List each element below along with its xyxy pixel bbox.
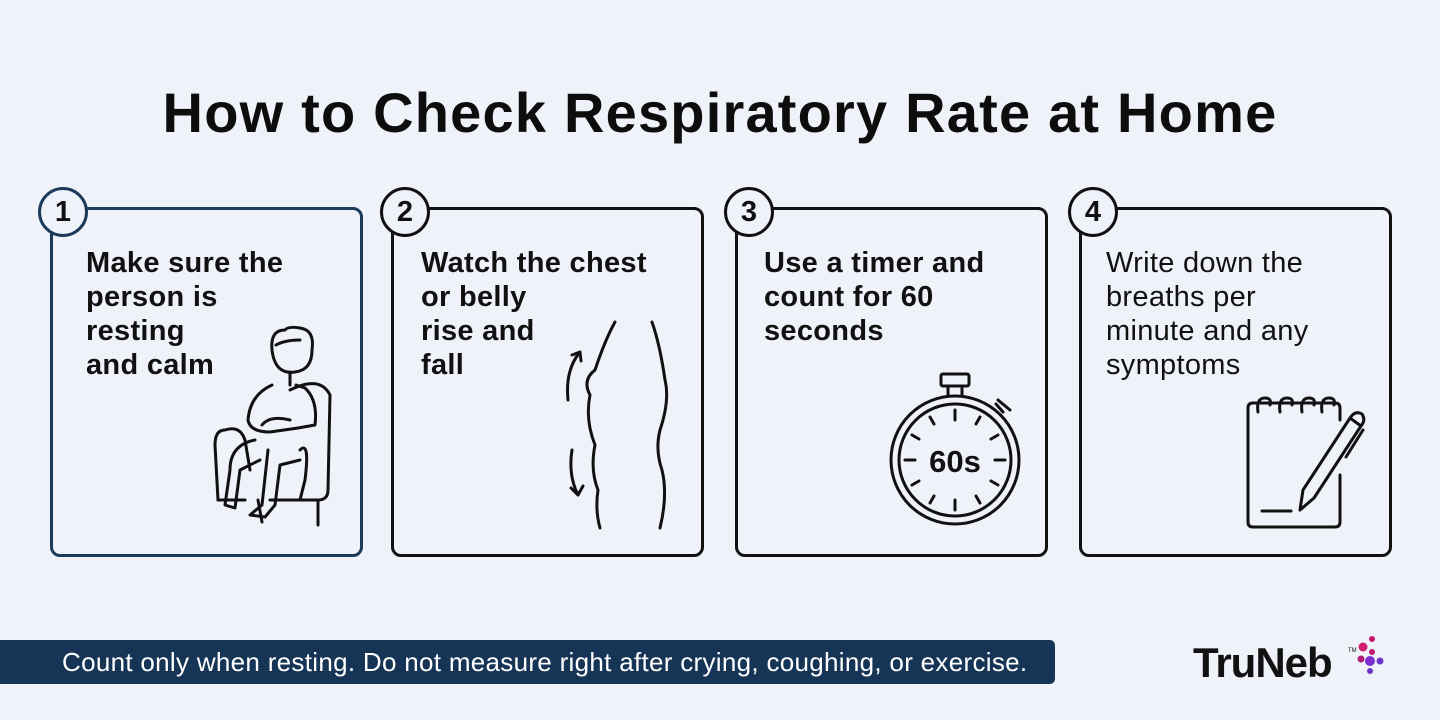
footer note bar bbox=[0, 640, 1055, 684]
title: How to Check Respiratory Rate at Home bbox=[163, 81, 1277, 144]
text: step 3: seconds bbox=[764, 315, 884, 347]
text: step 1: Make sure the bbox=[86, 247, 283, 279]
text: step 1 bbox=[86, 247, 283, 381]
panel: step 3 bbox=[735, 207, 1048, 557]
text: step 1: person is bbox=[86, 281, 218, 313]
text: step 3: Use a timer and bbox=[764, 247, 984, 279]
text: step 4 bbox=[1106, 247, 1308, 381]
text: step 2: rise and bbox=[421, 315, 535, 347]
text: step 4: Write down the bbox=[1106, 247, 1303, 279]
icon: person in armchair bbox=[215, 327, 330, 525]
text: step 2 bbox=[421, 247, 647, 381]
badge 1 bbox=[38, 187, 88, 237]
icon: stopwatch 60s bbox=[891, 374, 1019, 524]
badge 3 bbox=[724, 187, 774, 237]
badge 2: 2 bbox=[397, 196, 413, 228]
badge 3: 3 bbox=[741, 196, 757, 228]
panel: step 1 bbox=[50, 207, 363, 557]
text: step 4: breaths per bbox=[1106, 281, 1256, 313]
text: step 1: resting bbox=[86, 315, 185, 347]
badge 4 bbox=[1068, 187, 1118, 237]
text: step 2: fall bbox=[421, 349, 464, 381]
text: step 3 bbox=[764, 247, 984, 347]
text: step 2: or belly bbox=[421, 281, 527, 313]
badge 4: 4 bbox=[1085, 196, 1101, 228]
text: step 3: count for 60 bbox=[764, 281, 934, 313]
logo: TruNeb bbox=[1193, 636, 1384, 686]
footer note bar: Count only when resting. Do not measure right after crying, coughing, or exercise. bbox=[62, 647, 1027, 677]
icon: notepad and pen bbox=[1248, 398, 1364, 527]
text: step 1: and calm bbox=[86, 349, 214, 381]
badge 1: 1 bbox=[55, 196, 71, 228]
text: step 2: Watch the chest bbox=[421, 247, 647, 279]
text: step 4: minute and any bbox=[1106, 315, 1308, 347]
logo: TruNeb: TM bbox=[1348, 648, 1357, 654]
panel: step 4 bbox=[1079, 207, 1392, 557]
icon: stopwatch 60s: 60s bbox=[929, 444, 981, 479]
icon: chest rise and fall bbox=[568, 322, 667, 528]
badge 2 bbox=[380, 187, 430, 237]
text: step 4: symptoms bbox=[1106, 349, 1241, 381]
logo: TruNeb: TruNeb bbox=[1193, 639, 1332, 686]
panel: step 2 bbox=[391, 207, 704, 557]
